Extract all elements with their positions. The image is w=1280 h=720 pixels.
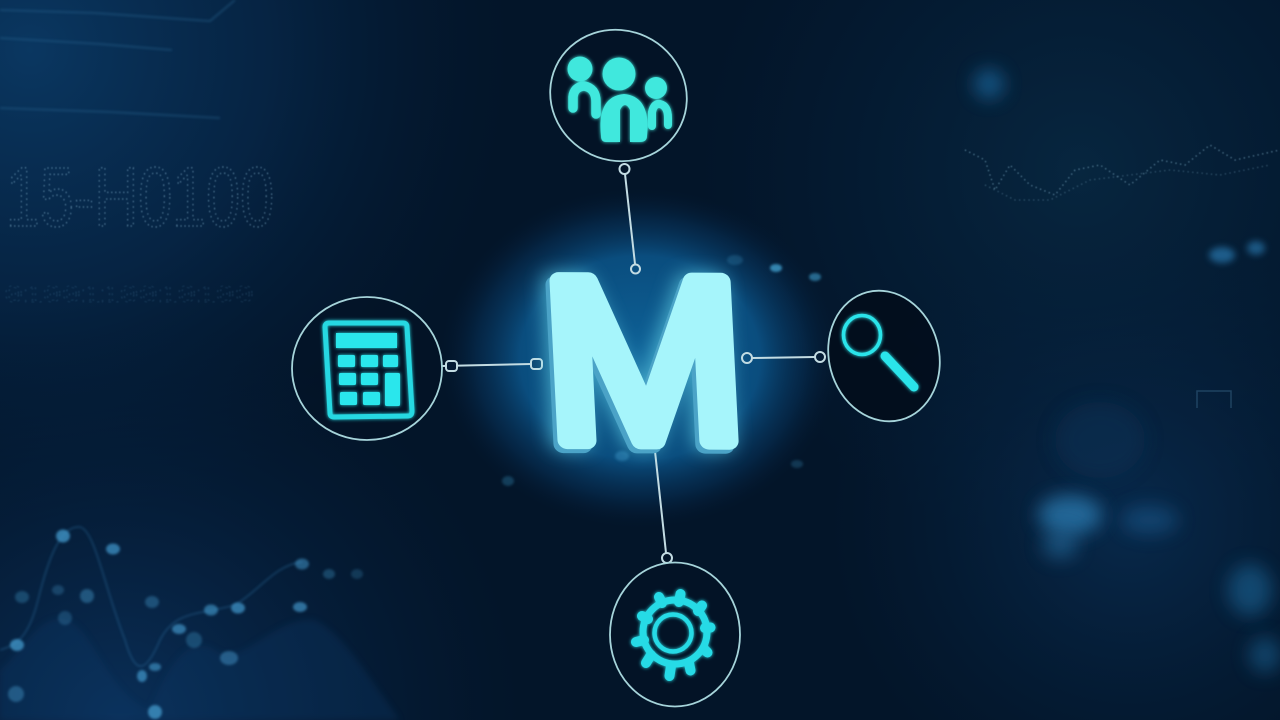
node ring [528, 7, 709, 184]
background: blurred bokeh lights right [974, 69, 1280, 673]
icon: gear [636, 594, 710, 676]
node ring [814, 278, 954, 434]
central letter M: M [537, 231, 752, 490]
connector: bottom [654, 442, 672, 563]
icon: people [568, 56, 668, 142]
background: faint signal line top right [965, 145, 1280, 200]
node ring [292, 297, 442, 440]
background: circuit lines top left [0, 0, 235, 118]
background: blurred line chart bottom left [0, 527, 400, 720]
small glow dots around hub [502, 255, 821, 486]
node: magnifier [814, 278, 954, 434]
node: gear [610, 562, 740, 706]
connector: left [442, 359, 542, 371]
background: faint digits [4, 150, 274, 310]
connector: top [620, 164, 640, 274]
background: faint digits: 0100110010100 [4, 283, 254, 310]
node: people [528, 7, 709, 184]
background: faint digits: 15-H0100 [6, 150, 274, 244]
central letter M: M [531, 232, 746, 491]
node: calculator [292, 297, 442, 440]
connector: right [742, 352, 825, 363]
icon: calculator [325, 323, 412, 417]
node ring [610, 562, 740, 706]
connector lines [442, 164, 825, 563]
central letter M: M [533, 235, 748, 494]
icon: magnifying glass [844, 316, 914, 387]
